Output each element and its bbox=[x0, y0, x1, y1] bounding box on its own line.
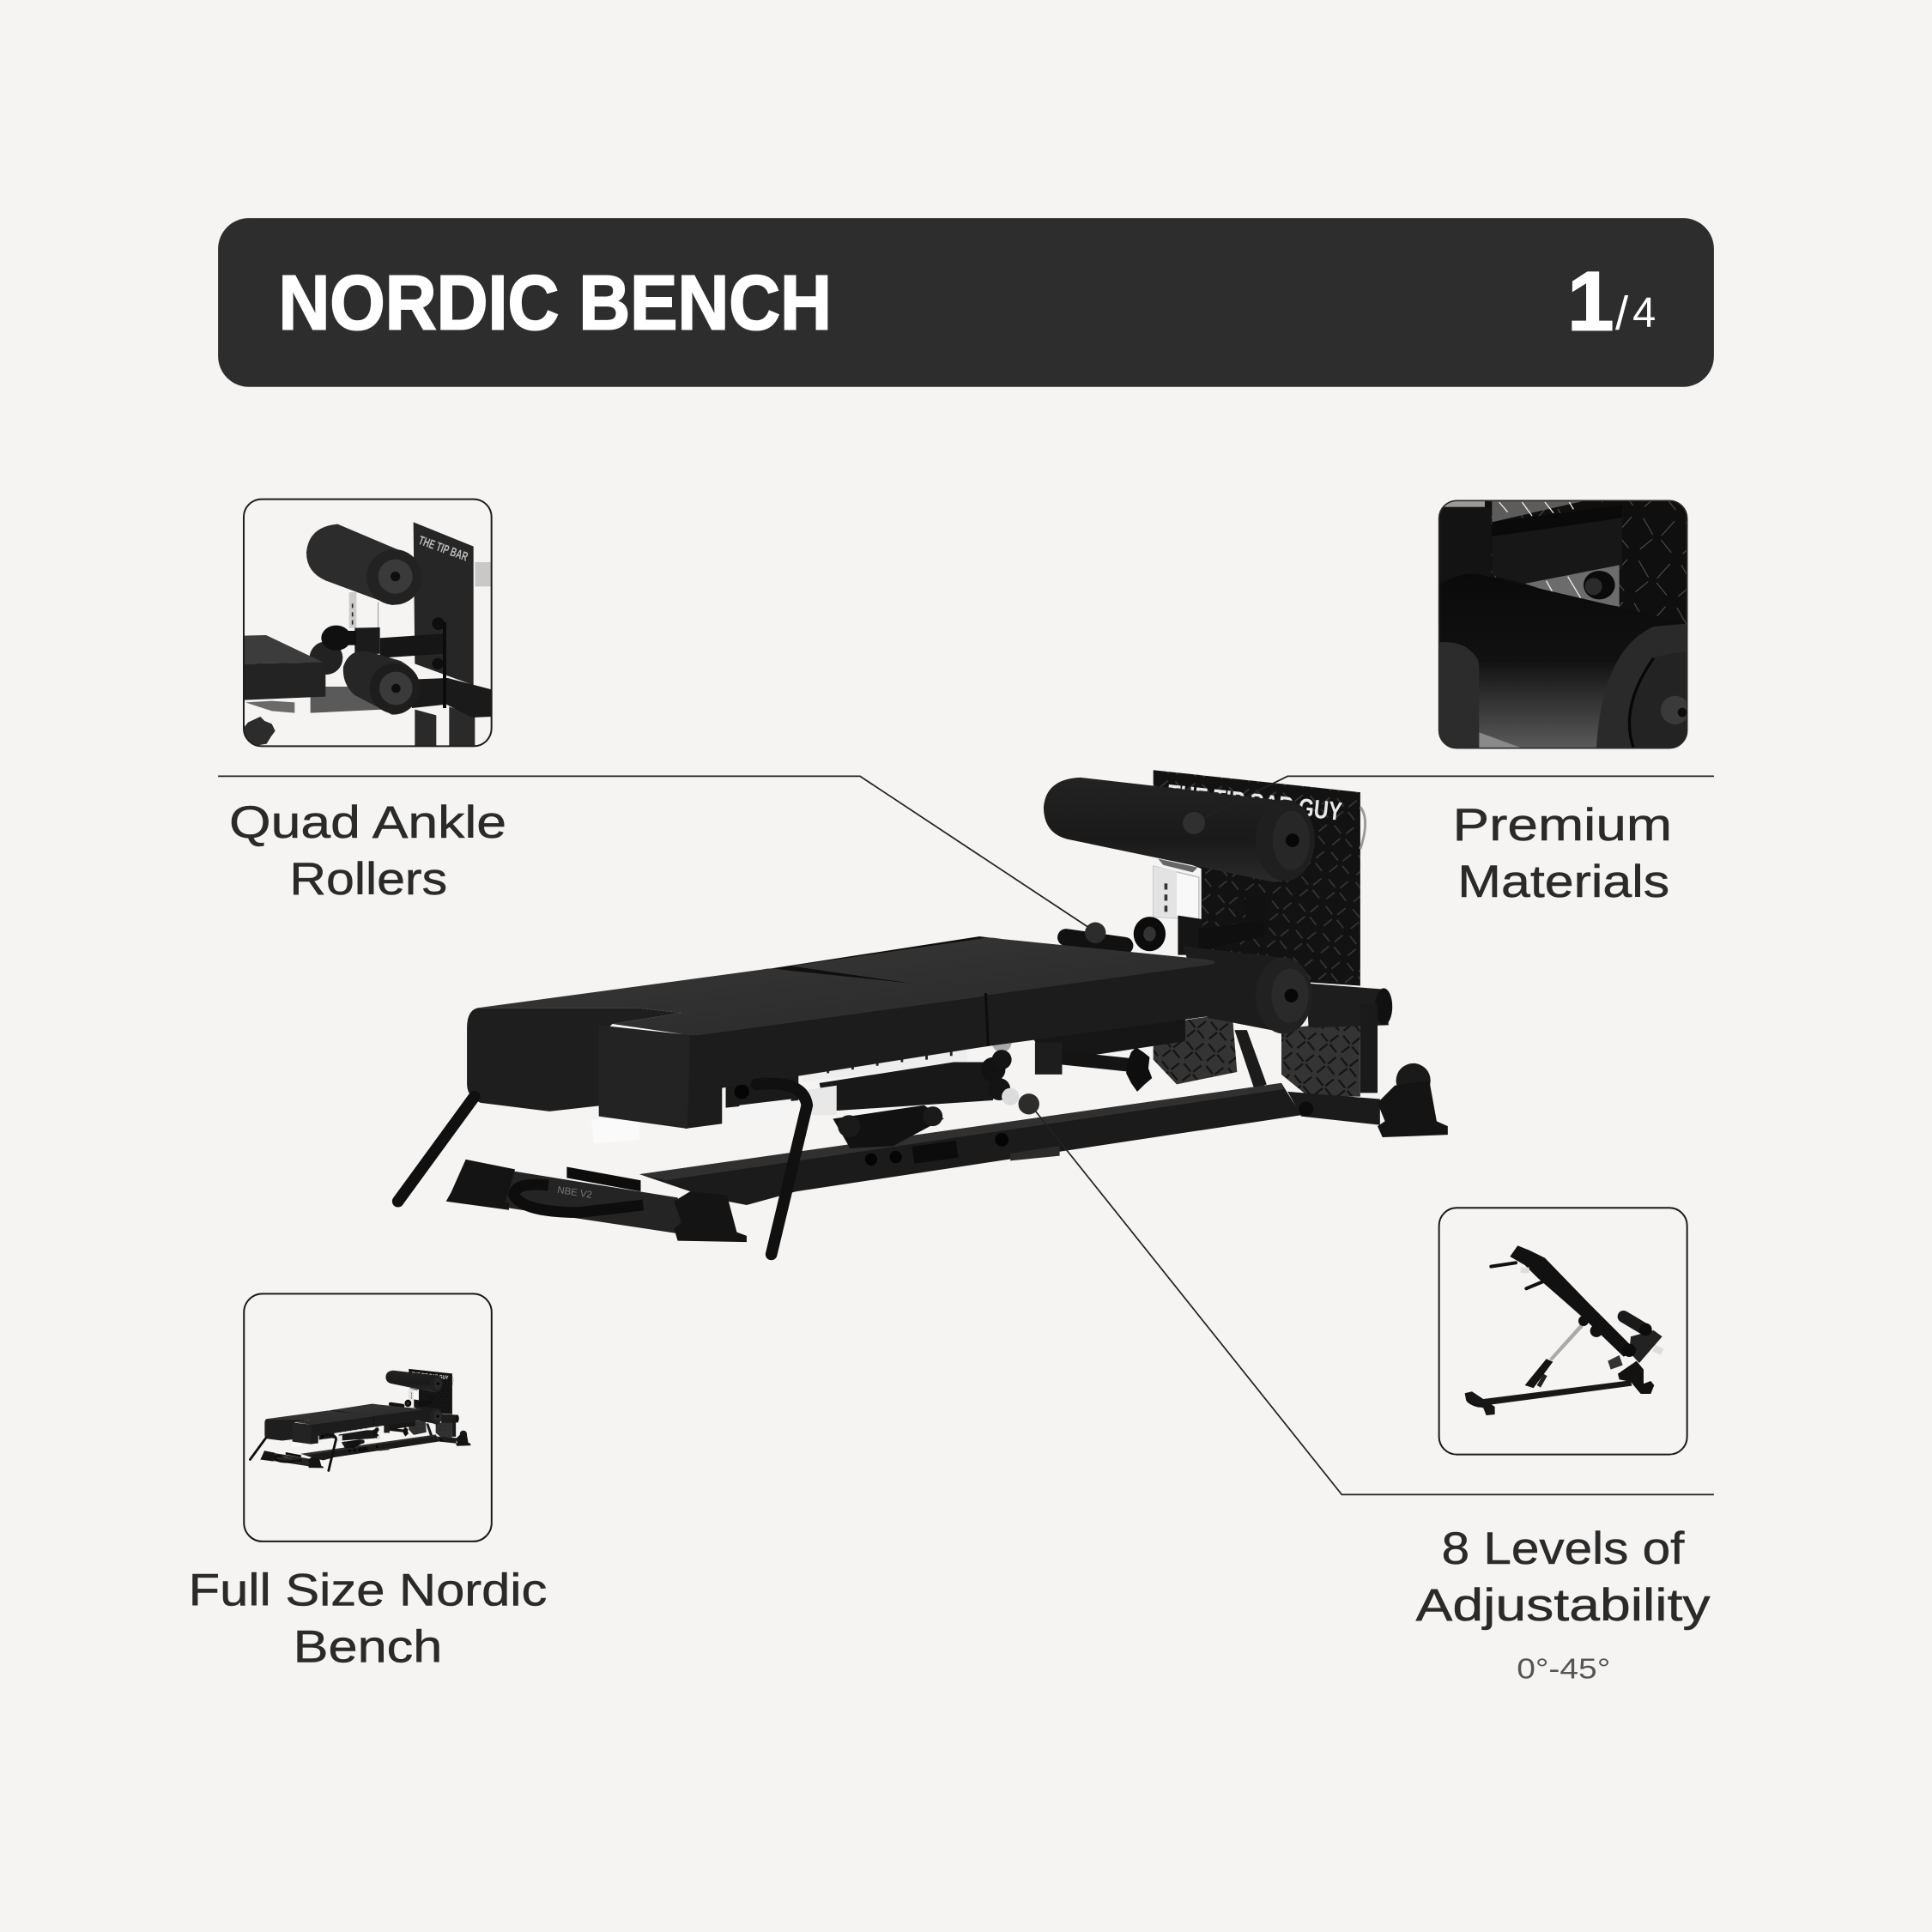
inclined bench silhouette bbox=[1465, 1245, 1664, 1415]
panel: premium materials thumbnail bbox=[1439, 500, 1689, 748]
backplate with logo: THE TIP BAR GUY bbox=[1166, 780, 1343, 827]
adjustment mechanism under pads bbox=[589, 1033, 1152, 1148]
page counter: / bbox=[1615, 287, 1629, 339]
panel: full size nordic bench thumbnail bbox=[244, 1293, 492, 1541]
page counter: 1 bbox=[1567, 255, 1614, 348]
panel: quad ankle rollers thumbnail bbox=[242, 500, 495, 746]
label: premium materials: Materials bbox=[1457, 857, 1669, 907]
label: quad ankle rollers: Rollers bbox=[289, 854, 447, 905]
marker: quad ankle rollers bbox=[1085, 923, 1105, 943]
front foot with handle: NBE V2 bbox=[556, 1185, 593, 1201]
panel: quad ankle rollers thumbnail: THE TIP BAR bbox=[416, 534, 469, 565]
callout: premium materials leader bbox=[1193, 776, 1714, 823]
grip handles bbox=[398, 1083, 807, 1254]
main beam bbox=[639, 1083, 1301, 1205]
title: NORDIC BENCH bbox=[278, 259, 832, 346]
marker: premium materials bbox=[1183, 812, 1205, 834]
marker: adjustability bbox=[1019, 1093, 1039, 1114]
label: full size nordic bench: Bench bbox=[294, 1622, 442, 1673]
callout: adjustability leader bbox=[1029, 1103, 1714, 1494]
miniature bench image bbox=[250, 1369, 470, 1470]
page counter: 4 bbox=[1632, 289, 1656, 336]
panel: adjustability thumbnail bbox=[1439, 1208, 1687, 1455]
front pad with notch bbox=[467, 968, 988, 1129]
label: quad ankle rollers: Quad Ankle bbox=[229, 797, 506, 848]
label: angle range: 0°-45° bbox=[1517, 1652, 1610, 1684]
label: full size nordic bench: Full Size Nordic bbox=[189, 1566, 547, 1616]
front foot with handle bbox=[446, 1160, 747, 1242]
rear foot bbox=[1378, 1063, 1448, 1137]
label: premium materials bbox=[1453, 800, 1672, 907]
main product image: nordic bench bbox=[398, 770, 1448, 1254]
backplate with logo bbox=[1154, 770, 1366, 985]
lower ankle roller bbox=[1183, 947, 1312, 1033]
rear pad bbox=[772, 936, 1216, 1047]
top ankle roller bbox=[1044, 778, 1315, 882]
upright post, knob and top bracket bbox=[1154, 866, 1265, 955]
header bar bbox=[218, 218, 1714, 387]
label: full size nordic bench bbox=[189, 1566, 547, 1673]
callout: quad ankle rollers leader bbox=[218, 776, 1089, 928]
label: 8 levels of adjustability bbox=[1415, 1523, 1711, 1631]
page counter bbox=[1567, 255, 1656, 348]
label: premium materials: Premium bbox=[1453, 800, 1672, 851]
label: quad ankle rollers bbox=[229, 797, 506, 905]
label: 8 levels of adjustability: Adjustability bbox=[1415, 1580, 1711, 1631]
label: 8 levels of adjustability: 8 Levels of bbox=[1442, 1523, 1685, 1574]
lower plates and rear frame bbox=[1154, 984, 1392, 1125]
pivot bracket bbox=[1033, 1015, 1313, 1117]
rear cross roller and adjustment knob bbox=[1057, 917, 1166, 955]
